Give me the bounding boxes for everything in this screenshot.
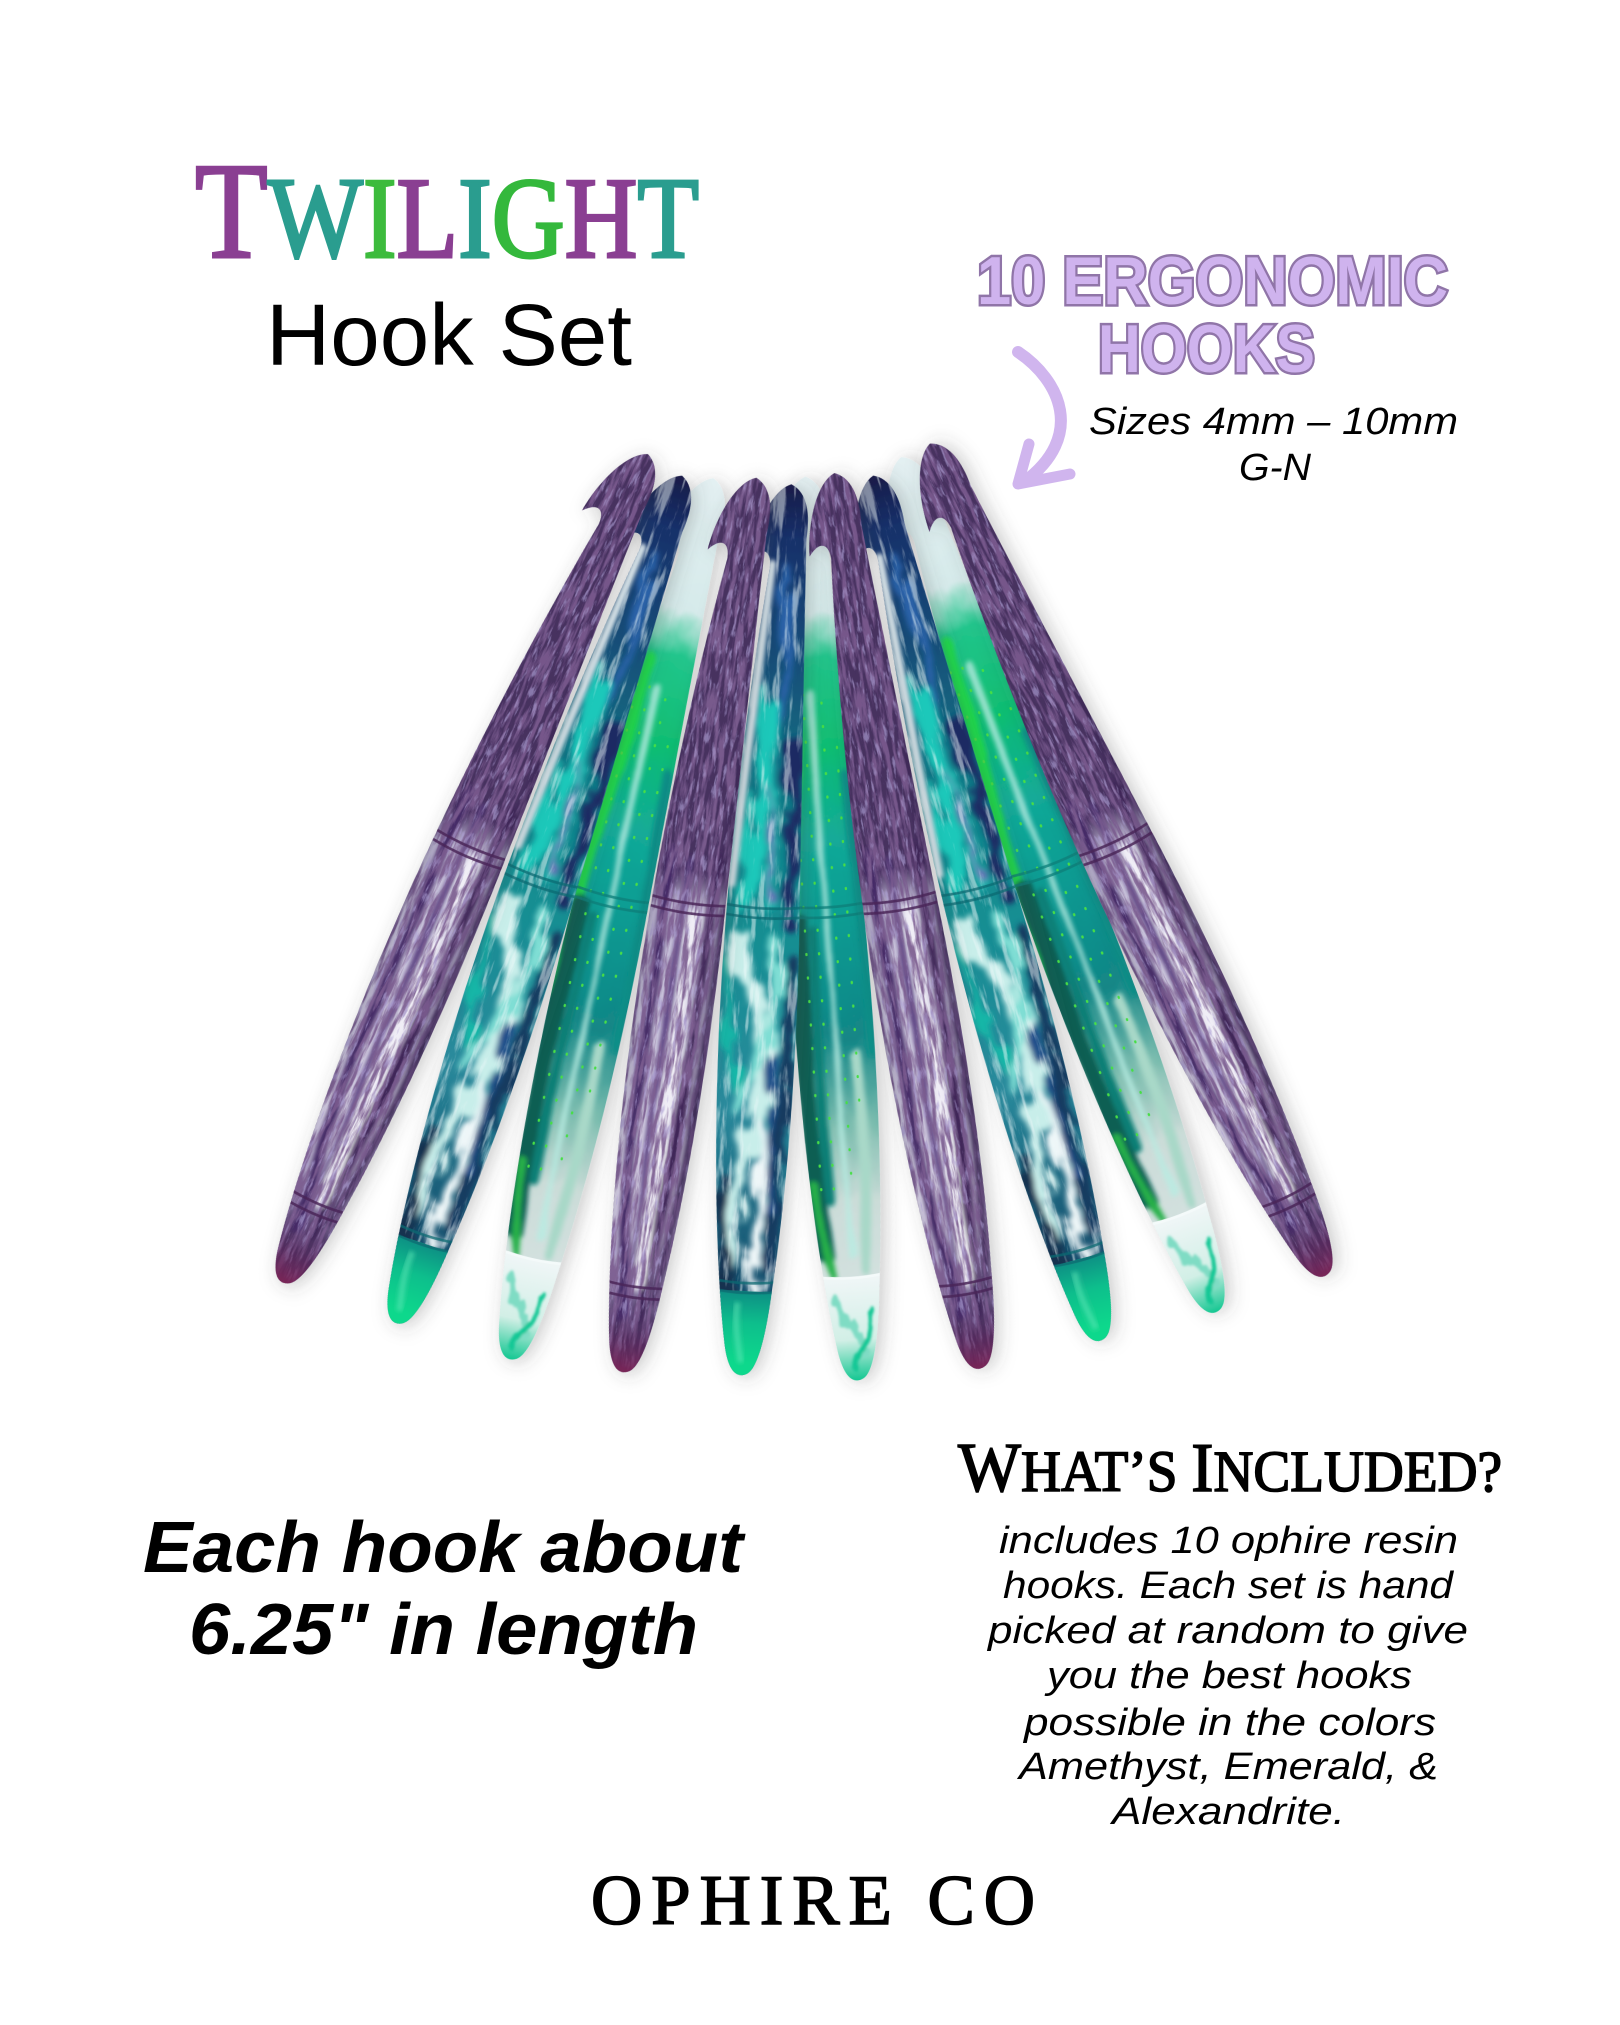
sizes note: Sizes 4mm – 10mm bbox=[1089, 401, 1458, 443]
sizes note: G-N bbox=[1239, 447, 1312, 489]
callout heading: 10 ergonomic hooks: 10 ERGONOMIC bbox=[977, 243, 1448, 319]
hook 4: amethyst bbox=[566, 460, 806, 1398]
hook 6: alexandrite bbox=[735, 446, 922, 1412]
hook 2: emerald swirl bbox=[339, 449, 731, 1357]
hook 10: amethyst bbox=[871, 414, 1383, 1317]
subtitle: Hook Set: Hook Set bbox=[266, 287, 632, 384]
text block: what's included description: Alexandrite. bbox=[1110, 1791, 1345, 1833]
sizes note bbox=[1089, 401, 1458, 489]
text block: what's included description: Amethyst, Emerald, & bbox=[1017, 1746, 1438, 1788]
text block: what's included description: hooks. Each set is hand bbox=[1003, 1565, 1455, 1607]
arrow: curved pointer to hooks bbox=[1018, 352, 1070, 484]
length callout bbox=[143, 1508, 746, 1670]
brand: Ophire Co: OPHIRE CO bbox=[591, 1862, 1035, 1940]
length callout: 6.25" in length bbox=[189, 1590, 698, 1670]
callout heading: 10 ergonomic hooks: HOOKS bbox=[1098, 311, 1315, 387]
text block: what's included description: possible in the colors bbox=[1023, 1702, 1436, 1744]
title: Twilight: TWILIGHT bbox=[195, 135, 699, 287]
hook 8: emerald swirl bbox=[814, 454, 1156, 1373]
length callout: Each hook about bbox=[143, 1508, 746, 1588]
hook 3: alexandrite bbox=[441, 437, 776, 1400]
chart: fan of 10 crochet hooks bbox=[225, 411, 1383, 1412]
hook 9: alexandrite bbox=[827, 411, 1285, 1361]
hook 5: emerald swirl bbox=[686, 472, 840, 1396]
text block: what's included description: you the best hooks bbox=[1044, 1655, 1412, 1697]
hook 7: amethyst bbox=[774, 456, 1036, 1396]
text block: what's included description: includes 10 ophire resin bbox=[999, 1520, 1458, 1562]
hook 1: amethyst bbox=[225, 422, 696, 1321]
text block: what's included description bbox=[987, 1520, 1468, 1833]
text block: what's included description: picked at random to give bbox=[987, 1610, 1468, 1652]
heading: What's Included: WHAT’S INCLUDED? bbox=[958, 1430, 1502, 1507]
callout heading: 10 ergonomic hooks bbox=[977, 243, 1448, 387]
